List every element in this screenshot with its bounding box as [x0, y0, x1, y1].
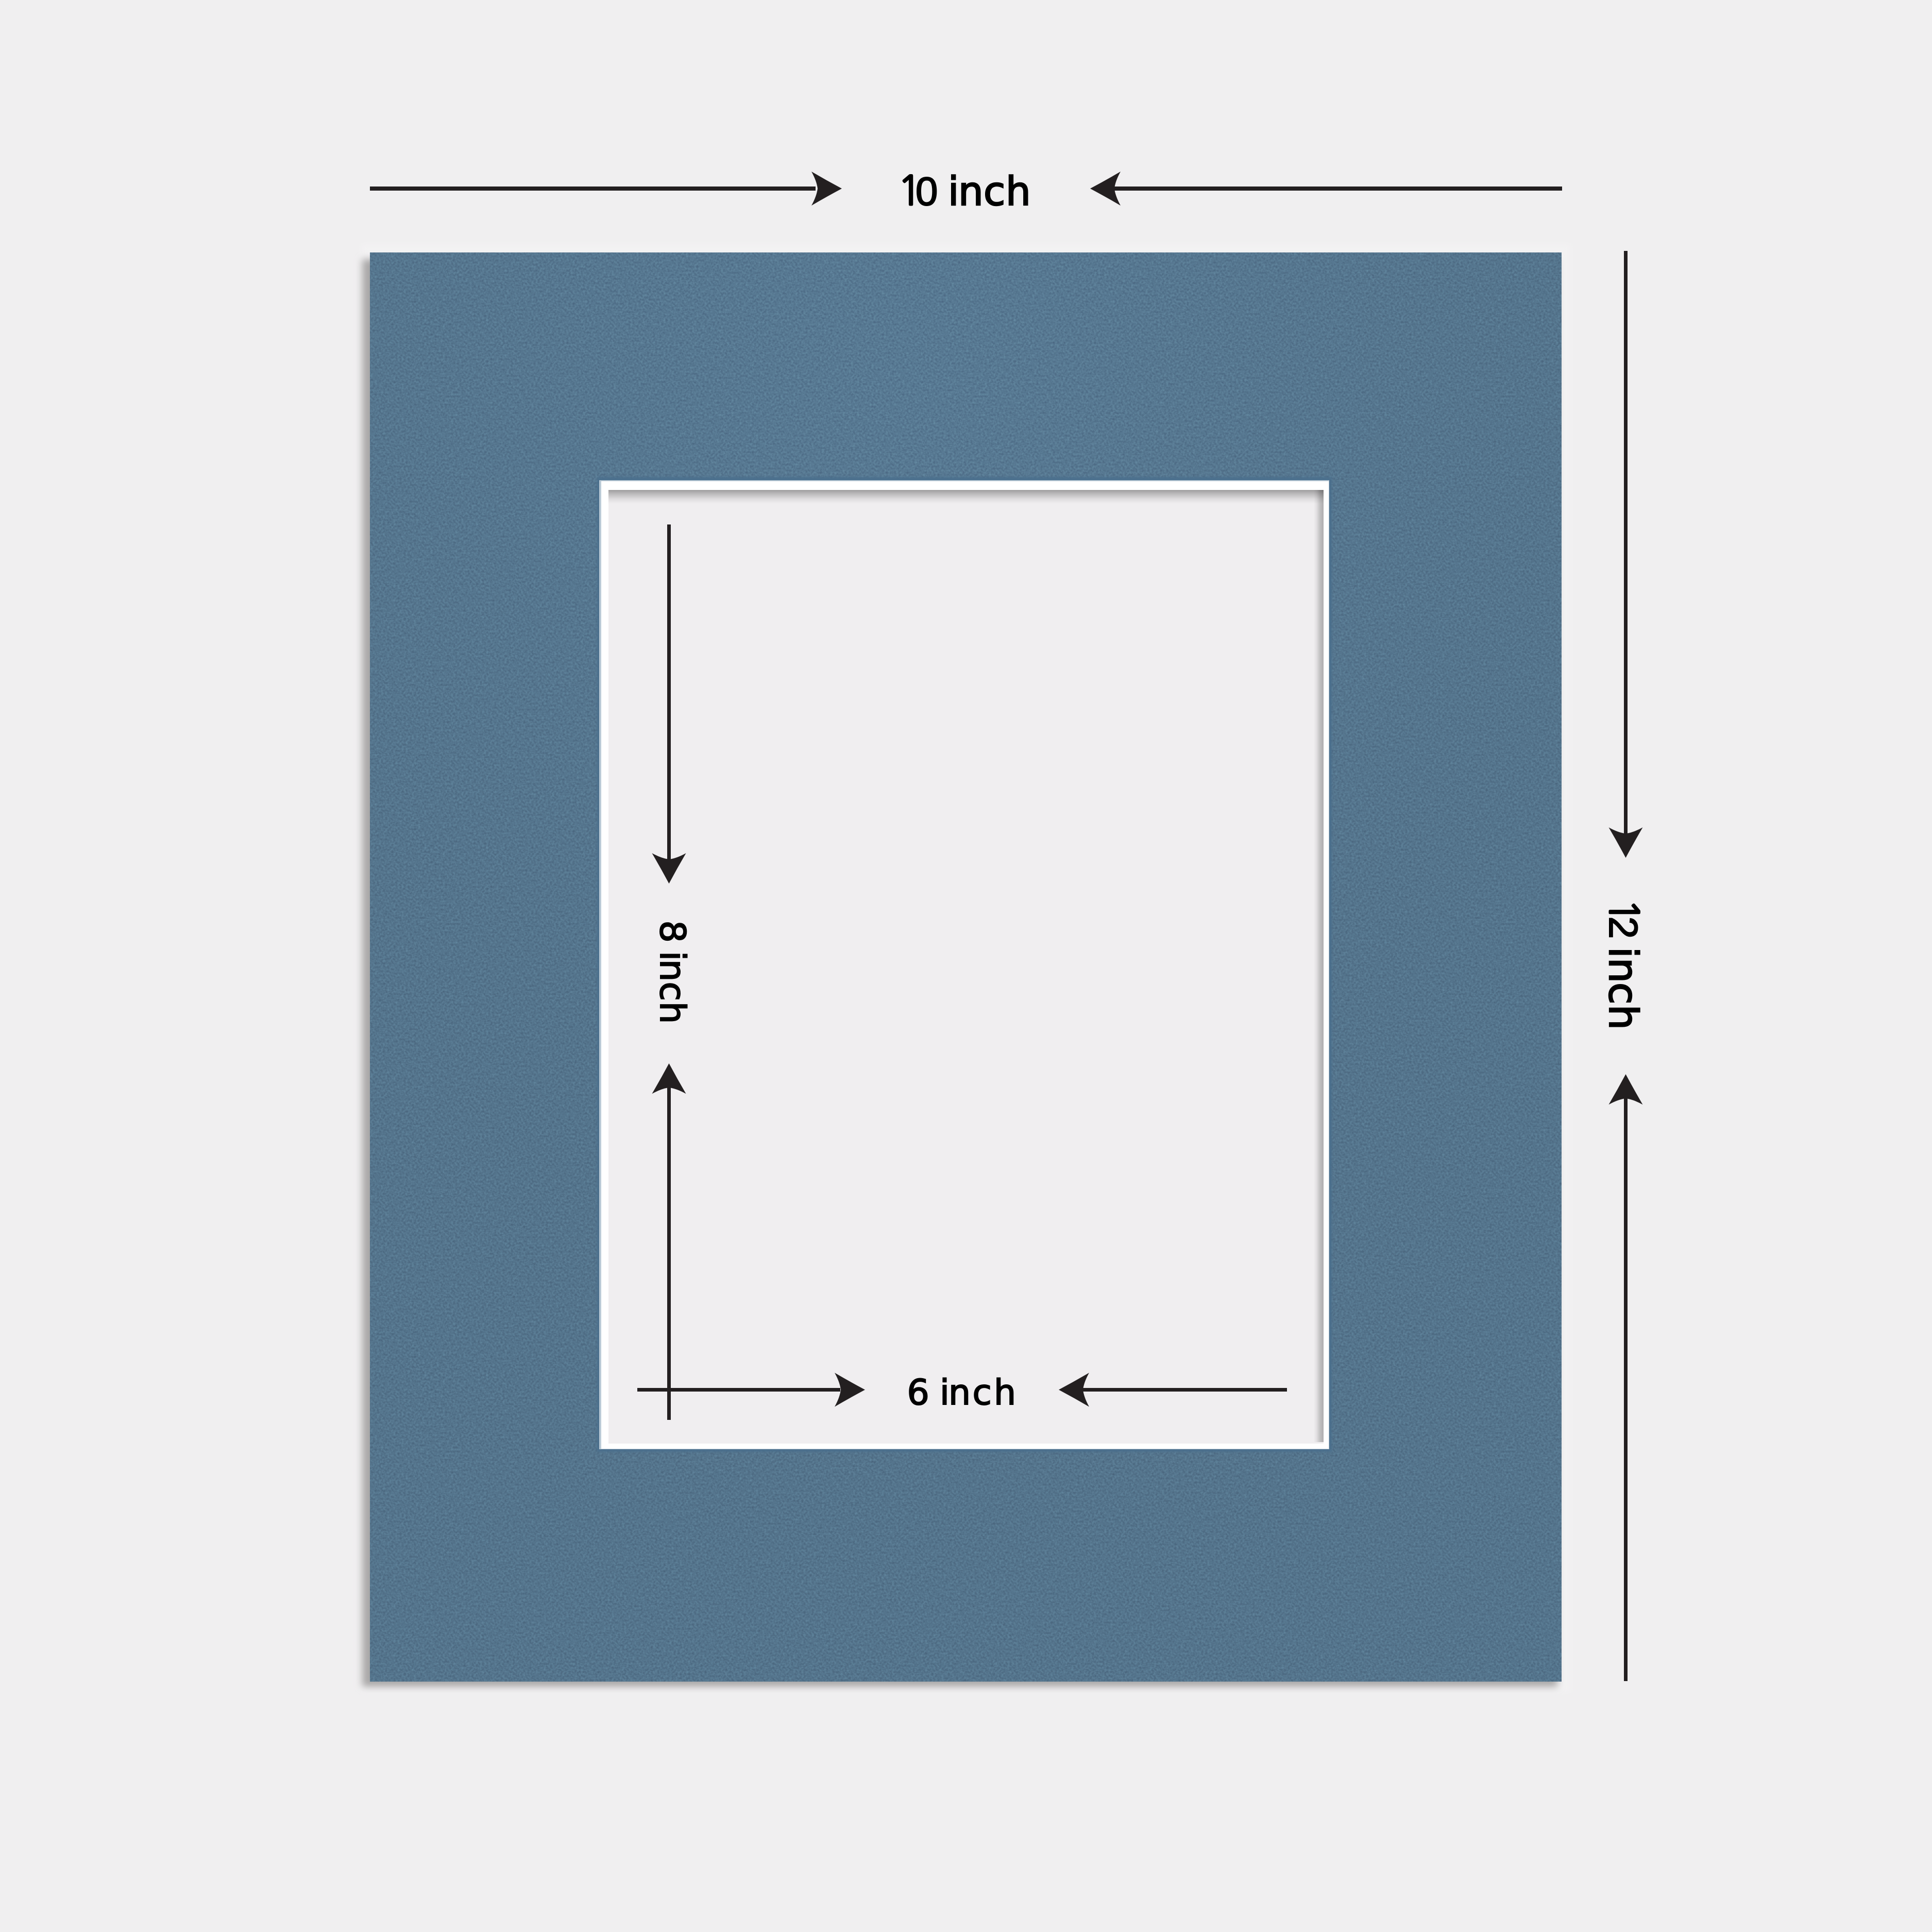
label: 12 inch: inch	[1600, 947, 1646, 1030]
label: 10 inch: 0	[916, 168, 954, 214]
label: 8 inch: 8 inch	[652, 920, 692, 1024]
arrow: top right, pointing left	[1090, 172, 1562, 206]
panel: mat board	[362, 244, 1570, 1692]
label: 10 inch: 1	[897, 171, 922, 211]
arrow: window width, pointing left	[1059, 1372, 1287, 1406]
arrow: top left, pointing right	[370, 172, 842, 206]
label: 6 inch: 6 inch	[907, 1372, 1016, 1413]
label: 12 inch: 2	[1601, 917, 1646, 953]
arrow: right side, pointing down	[1608, 251, 1642, 858]
arrow: window height, pointing up	[652, 1063, 686, 1420]
label: 10 inch: inch	[948, 169, 1031, 215]
arrow: window width, pointing right	[637, 1372, 865, 1406]
label: 12 inch: 1	[1603, 899, 1643, 923]
arrow: window height, pointing down	[652, 524, 686, 884]
panel: window opening with white bevel	[597, 477, 1332, 1452]
arrow: right side, pointing up	[1608, 1074, 1642, 1681]
